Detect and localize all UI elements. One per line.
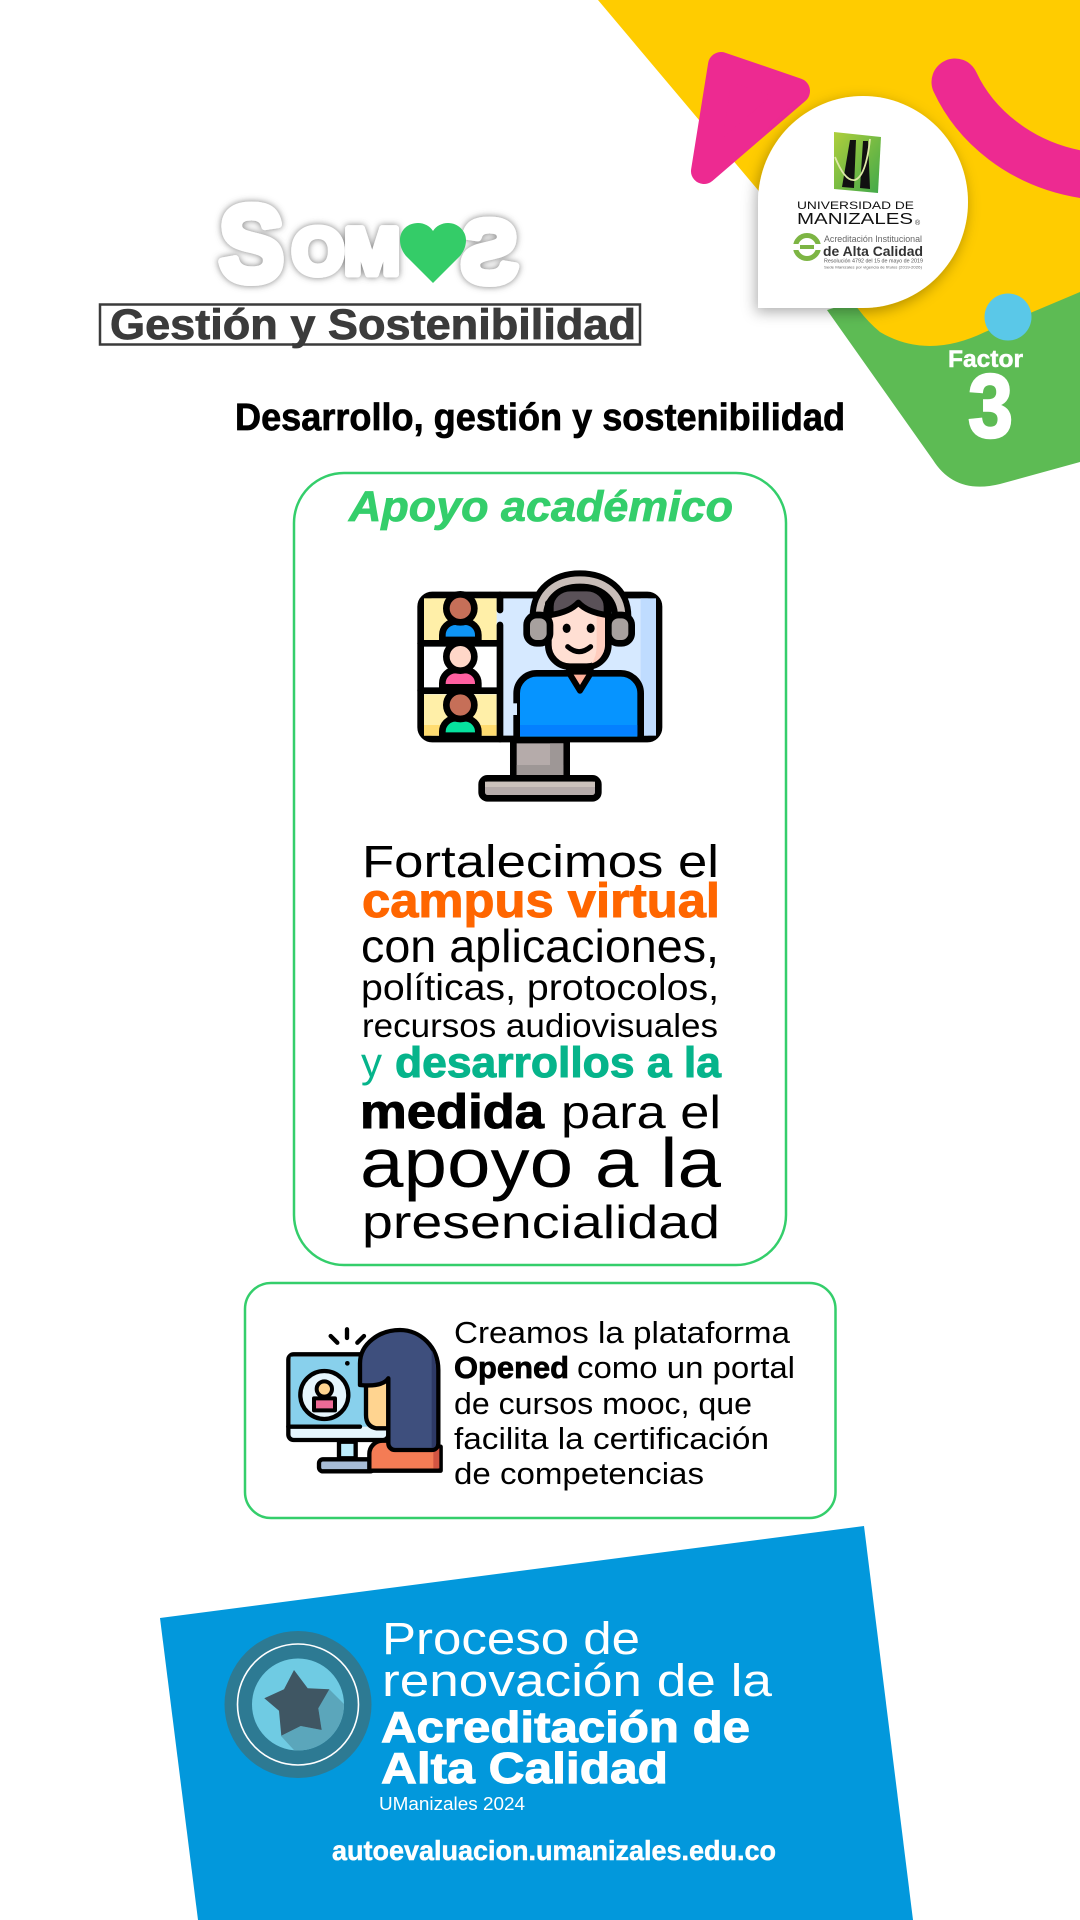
panel text: como un portal [577,1350,795,1385]
footer headline: renovación de la [382,1655,773,1706]
main statement: desarrollos a la [395,1039,722,1087]
icon: accreditation seal [792,236,822,258]
yellow corner shape [598,0,1080,346]
main statement: políticas, protocolos, [361,967,719,1008]
panel text: de competencias [454,1456,704,1491]
magenta arc [955,82,1080,175]
panel: apoyo académico [294,473,786,1265]
blue dot [984,294,1032,340]
university name: MANIZALES [797,211,913,228]
icon: woman at computer [288,1329,441,1471]
panel text: Opened [454,1350,569,1385]
footer headline: Alta Calidad [381,1744,668,1793]
main statement: y [361,1039,382,1086]
factor label [948,346,1023,457]
university logo badge [758,96,968,308]
accreditation text: Acreditación Institucional [824,234,922,244]
magenta triangle [704,65,797,171]
university name: ® [915,219,921,227]
footer headline: Proceso de [382,1613,640,1664]
icon: video call on monitor [421,580,659,798]
panel: plataforma Opened [245,1283,836,1518]
main statement: recursos audiovisuales [362,1007,718,1044]
footer headline [379,1613,773,1814]
main statement [360,836,722,1248]
subtitle: Desarrollo, gestión y sostenibilidad [235,397,845,439]
panel text [454,1315,795,1491]
footer panel [160,1526,913,1920]
main statement: presencialidad [362,1196,720,1248]
Somos logo: S [219,183,284,304]
accreditation text: Sede Manizales por vigencia de títulos (2019-2026) [824,266,922,270]
panel heading: Apoyo académico [348,483,733,531]
footer url: autoevaluacion.umanizales.edu.co [332,1835,776,1866]
green corner shape [827,280,1080,487]
icon: university emblem [834,132,881,193]
icon: star badge [224,1631,372,1778]
main statement: con aplicaciones, [361,920,719,972]
panel text: de cursos mooc, que [454,1386,752,1421]
main statement: campus virtual [362,875,720,928]
Somos logo: OM [292,214,400,288]
factor label: Factor [948,346,1023,373]
main statement: medida [360,1086,544,1139]
university name [797,200,921,228]
footer headline: Acreditación de [381,1703,750,1752]
panel text: Creamos la plataforma [454,1315,791,1350]
main statement: Fortalecimos el [362,836,719,887]
Somos logo: S [461,202,518,301]
icon: green heart [400,223,466,283]
panel text: facilita la certificación [454,1421,769,1456]
main statement: para el [561,1086,721,1138]
accreditation text [823,234,923,270]
main statement: apoyo a la [360,1124,721,1202]
university name: UNIVERSIDAD DE [797,200,914,212]
accreditation text: Resolución 4792 del 15 de mayo de 2019 [824,258,923,264]
accreditation text: de Alta Calidad [823,243,923,259]
footer headline: UManizales 2024 [379,1794,525,1814]
factor label: 3 [968,357,1013,457]
title box: Gestión y Sostenibilidad: Gestión y Sostenibilidad [110,301,636,349]
Somos logo [219,183,518,304]
